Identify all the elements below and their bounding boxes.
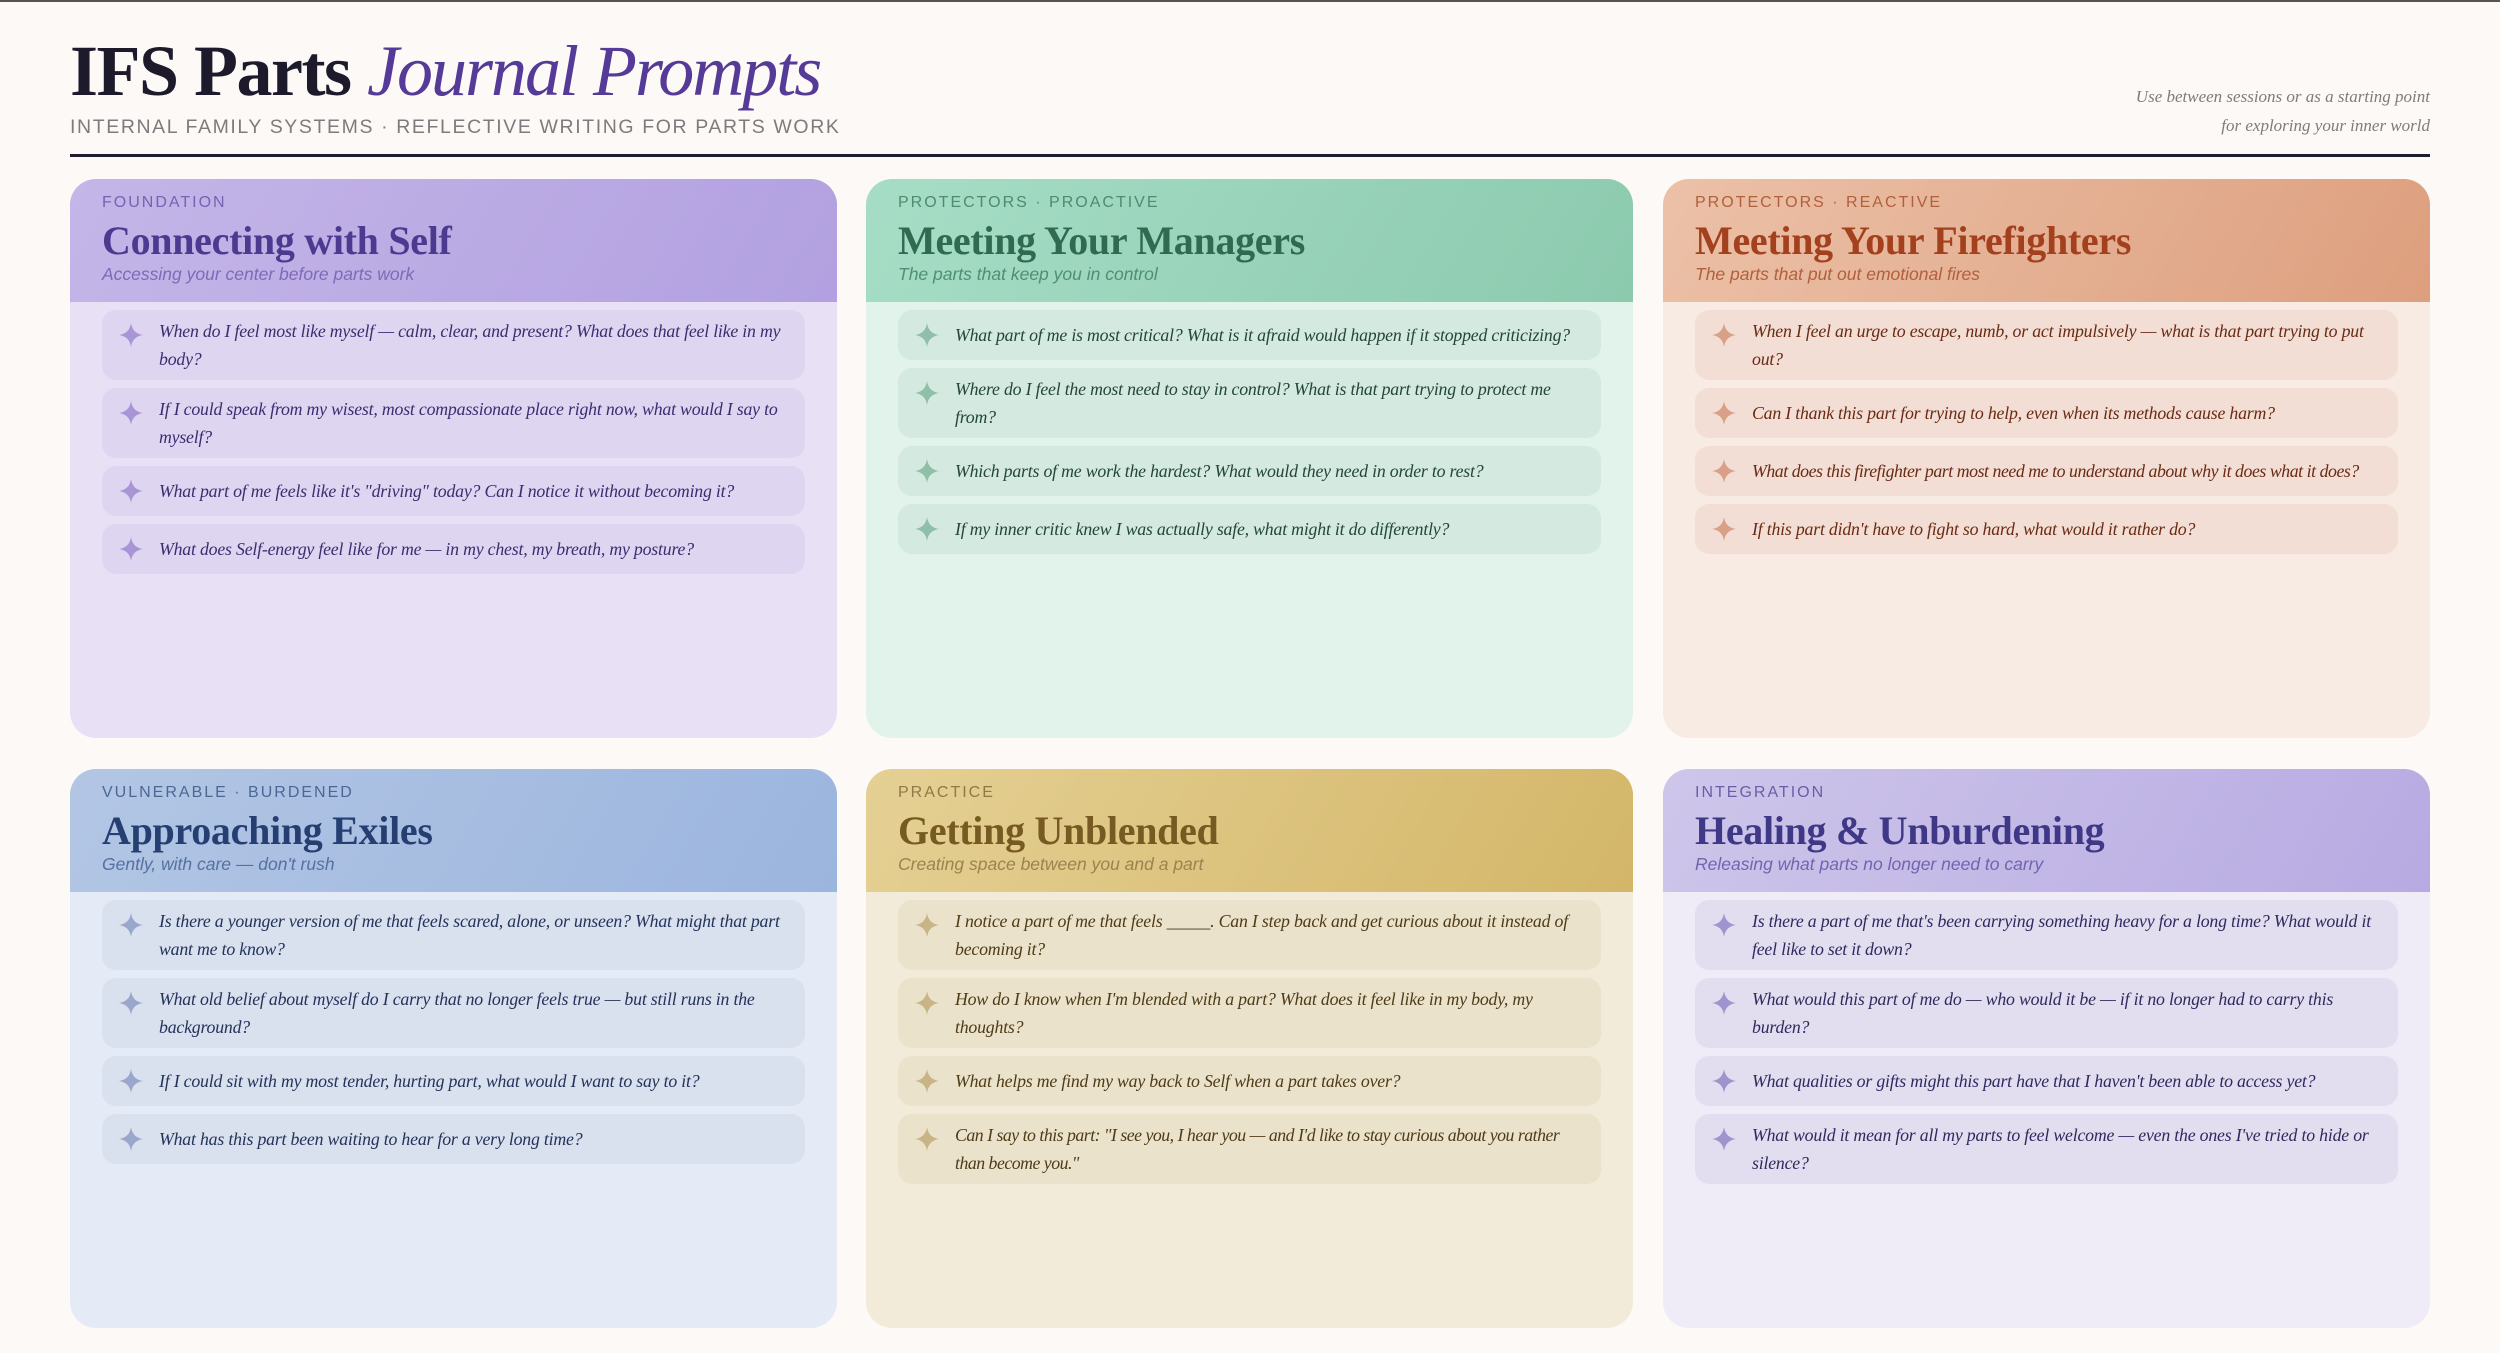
prompt list: What part of me is most critical? What is it afraid would happen if it stopped criticizing?: [955, 325, 1570, 345]
panel header: Healing & Unburdening: [1695, 808, 2104, 853]
prompt list: What does this firefighter part most need me to understand about why it does what it does?: [1752, 461, 2359, 481]
panel header: Meeting Your Firefighters: [1695, 218, 2131, 263]
prompt list: When do I feel most like myself — calm, clear, and present? What does that feel like in my body?: [159, 321, 780, 369]
panel header: Gently, with care — don't rush: [102, 854, 335, 874]
panel: exiles: [70, 769, 837, 1328]
panel: connecting with self: [70, 179, 837, 738]
panel header: Meeting Your Managers: [898, 218, 1305, 263]
prompt list: What has this part been waiting to hear for a very long time?: [159, 1129, 582, 1149]
panel: unburdening: [1663, 769, 2430, 1328]
panel header: FOUNDATION: [102, 194, 227, 211]
panel header: [866, 179, 1633, 302]
panel header: PRACTICE: [898, 784, 995, 801]
prompt list: [898, 310, 1601, 554]
panel header: Connecting with Self: [102, 218, 452, 263]
prompt list: What helps me find my way back to Self when a part takes over?: [955, 1071, 1400, 1091]
panel header: [1663, 179, 2430, 302]
prompt list: When I feel an urge to escape, numb, or act impulsively — what is that part trying to put out?: [1752, 321, 2364, 369]
panel header: [70, 769, 837, 892]
prompt list: What old belief about myself do I carry that no longer feels true — but still runs in the background?: [159, 989, 755, 1037]
prompt list: What would this part of me do — who would it be — if it no longer had to carry this burden?: [1752, 989, 2333, 1037]
prompt list: What part of me feels like it's "driving" today? Can I notice it without becoming it?: [159, 481, 734, 501]
prompt list: [102, 310, 805, 574]
panel header: Releasing what parts no longer need to carry: [1695, 854, 2043, 874]
prompt list: If I could sit with my most tender, hurting part, what would I want to say to it?: [159, 1071, 699, 1091]
panel header: PROTECTORS · PROACTIVE: [898, 194, 1160, 211]
panel header: Accessing your center before parts work: [102, 264, 414, 284]
prompt list: I notice a part of me that feels _____. Can I step back and get curious about it instead of becoming it?: [955, 911, 1568, 959]
prompt list: What does Self-energy feel like for me — in my chest, my breath, my posture?: [159, 539, 694, 559]
prompt list: [898, 900, 1601, 1184]
panel header: [70, 179, 837, 302]
prompt list: Is there a younger version of me that feels scared, alone, or unseen? What might that part want me to know?: [159, 911, 780, 959]
panel header: [866, 769, 1633, 892]
prompt list: If my inner critic knew I was actually safe, what might it do differently?: [955, 519, 1449, 539]
panel header: Creating space between you and a part: [898, 854, 1203, 874]
prompt list: If I could speak from my wisest, most compassionate place right now, what would I say to myself?: [159, 399, 778, 447]
prompt list: If this part didn't have to fight so hard, what would it rather do?: [1752, 519, 2195, 539]
header note: for exploring your inner world: [2221, 116, 2430, 135]
prompt list: Can I say to this part: "I see you, I hear you — and I'd like to stay curious about you rather than become you.": [955, 1125, 1559, 1173]
title: IFS Parts Journal Prompts: [70, 31, 820, 111]
header note: Use between sessions or as a starting point: [2136, 87, 2430, 106]
prompt list: What would it mean for all my parts to feel welcome — even the ones I've tried to hide or silence?: [1752, 1125, 2369, 1173]
panel header: Getting Unblended: [898, 808, 1219, 853]
panel header: The parts that keep you in control: [898, 264, 1158, 284]
panel header: INTEGRATION: [1695, 784, 1825, 801]
panel header: The parts that put out emotional fires: [1695, 264, 1980, 284]
prompt list: [1695, 900, 2398, 1184]
header note: [2136, 87, 2430, 135]
panel: unblended: [866, 769, 1633, 1328]
panel header: Approaching Exiles: [102, 808, 433, 853]
prompt list: Can I thank this part for trying to help, even when its methods cause harm?: [1752, 403, 2275, 423]
panel: firefighters: [1663, 179, 2430, 738]
prompt list: [1695, 310, 2398, 554]
prompt list: Is there a part of me that's been carrying something heavy for a long time? What would it feel like to set it down?: [1752, 911, 2371, 959]
panel: managers: [866, 179, 1633, 738]
prompt list: How do I know when I'm blended with a part? What does it feel like in my body, my thoughts?: [955, 989, 1533, 1037]
prompt list: [102, 900, 805, 1164]
prompt list: Which parts of me work the hardest? What would they need in order to rest?: [955, 461, 1483, 481]
panel header: [1663, 769, 2430, 892]
panel header: PROTECTORS · REACTIVE: [1695, 194, 1942, 211]
subtitle: INTERNAL FAMILY SYSTEMS · REFLECTIVE WRITING FOR PARTS WORK: [70, 116, 840, 138]
panel header: VULNERABLE · BURDENED: [102, 784, 354, 801]
prompt list: What qualities or gifts might this part have that I haven't been able to access yet?: [1752, 1071, 2315, 1091]
prompt list: Where do I feel the most need to stay in control? What is that part trying to protect me from?: [955, 379, 1551, 427]
